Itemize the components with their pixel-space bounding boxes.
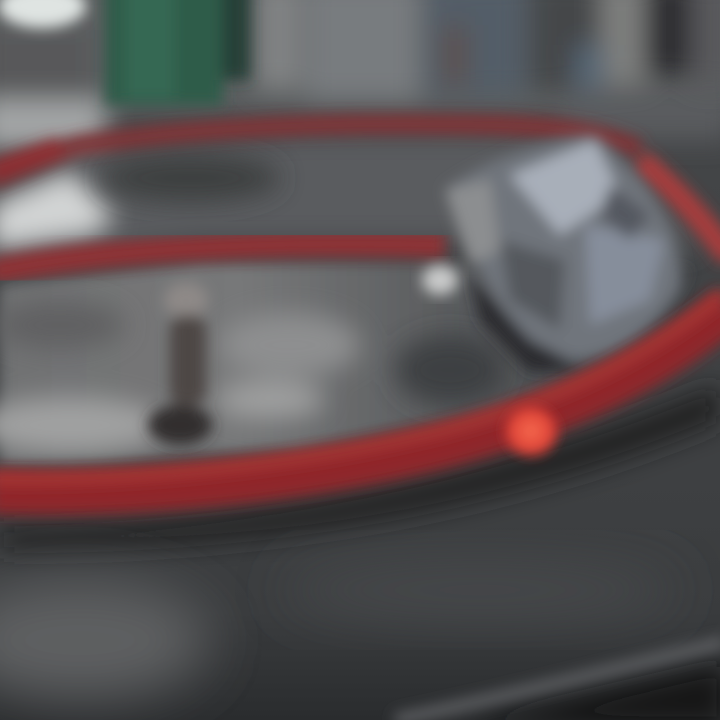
middle red ring [0,244,445,272]
red glow on the ring [497,399,565,463]
upper red ring [0,124,720,258]
bottles and objects at top [255,0,720,100]
dark reflection under upper ring [100,154,280,202]
green cylinder [105,0,250,105]
floor sheen, centre [280,560,680,620]
floor sheen, lower left [0,580,210,700]
ring interior: lower water [0,262,690,465]
shadow under front ring [0,385,720,550]
crumpled silver object [445,135,681,372]
light streak, lower right [395,642,720,720]
small figure in the water [148,282,212,445]
background: top area behind the rings [0,0,720,150]
bright reflection, left [0,170,115,250]
ring interior: upper water [0,135,700,265]
bright window, top left [0,0,86,28]
front red ring [0,293,720,493]
water highlights [0,301,505,453]
small white highlight beside the object [422,265,458,295]
dark corner, lower right [470,665,720,720]
